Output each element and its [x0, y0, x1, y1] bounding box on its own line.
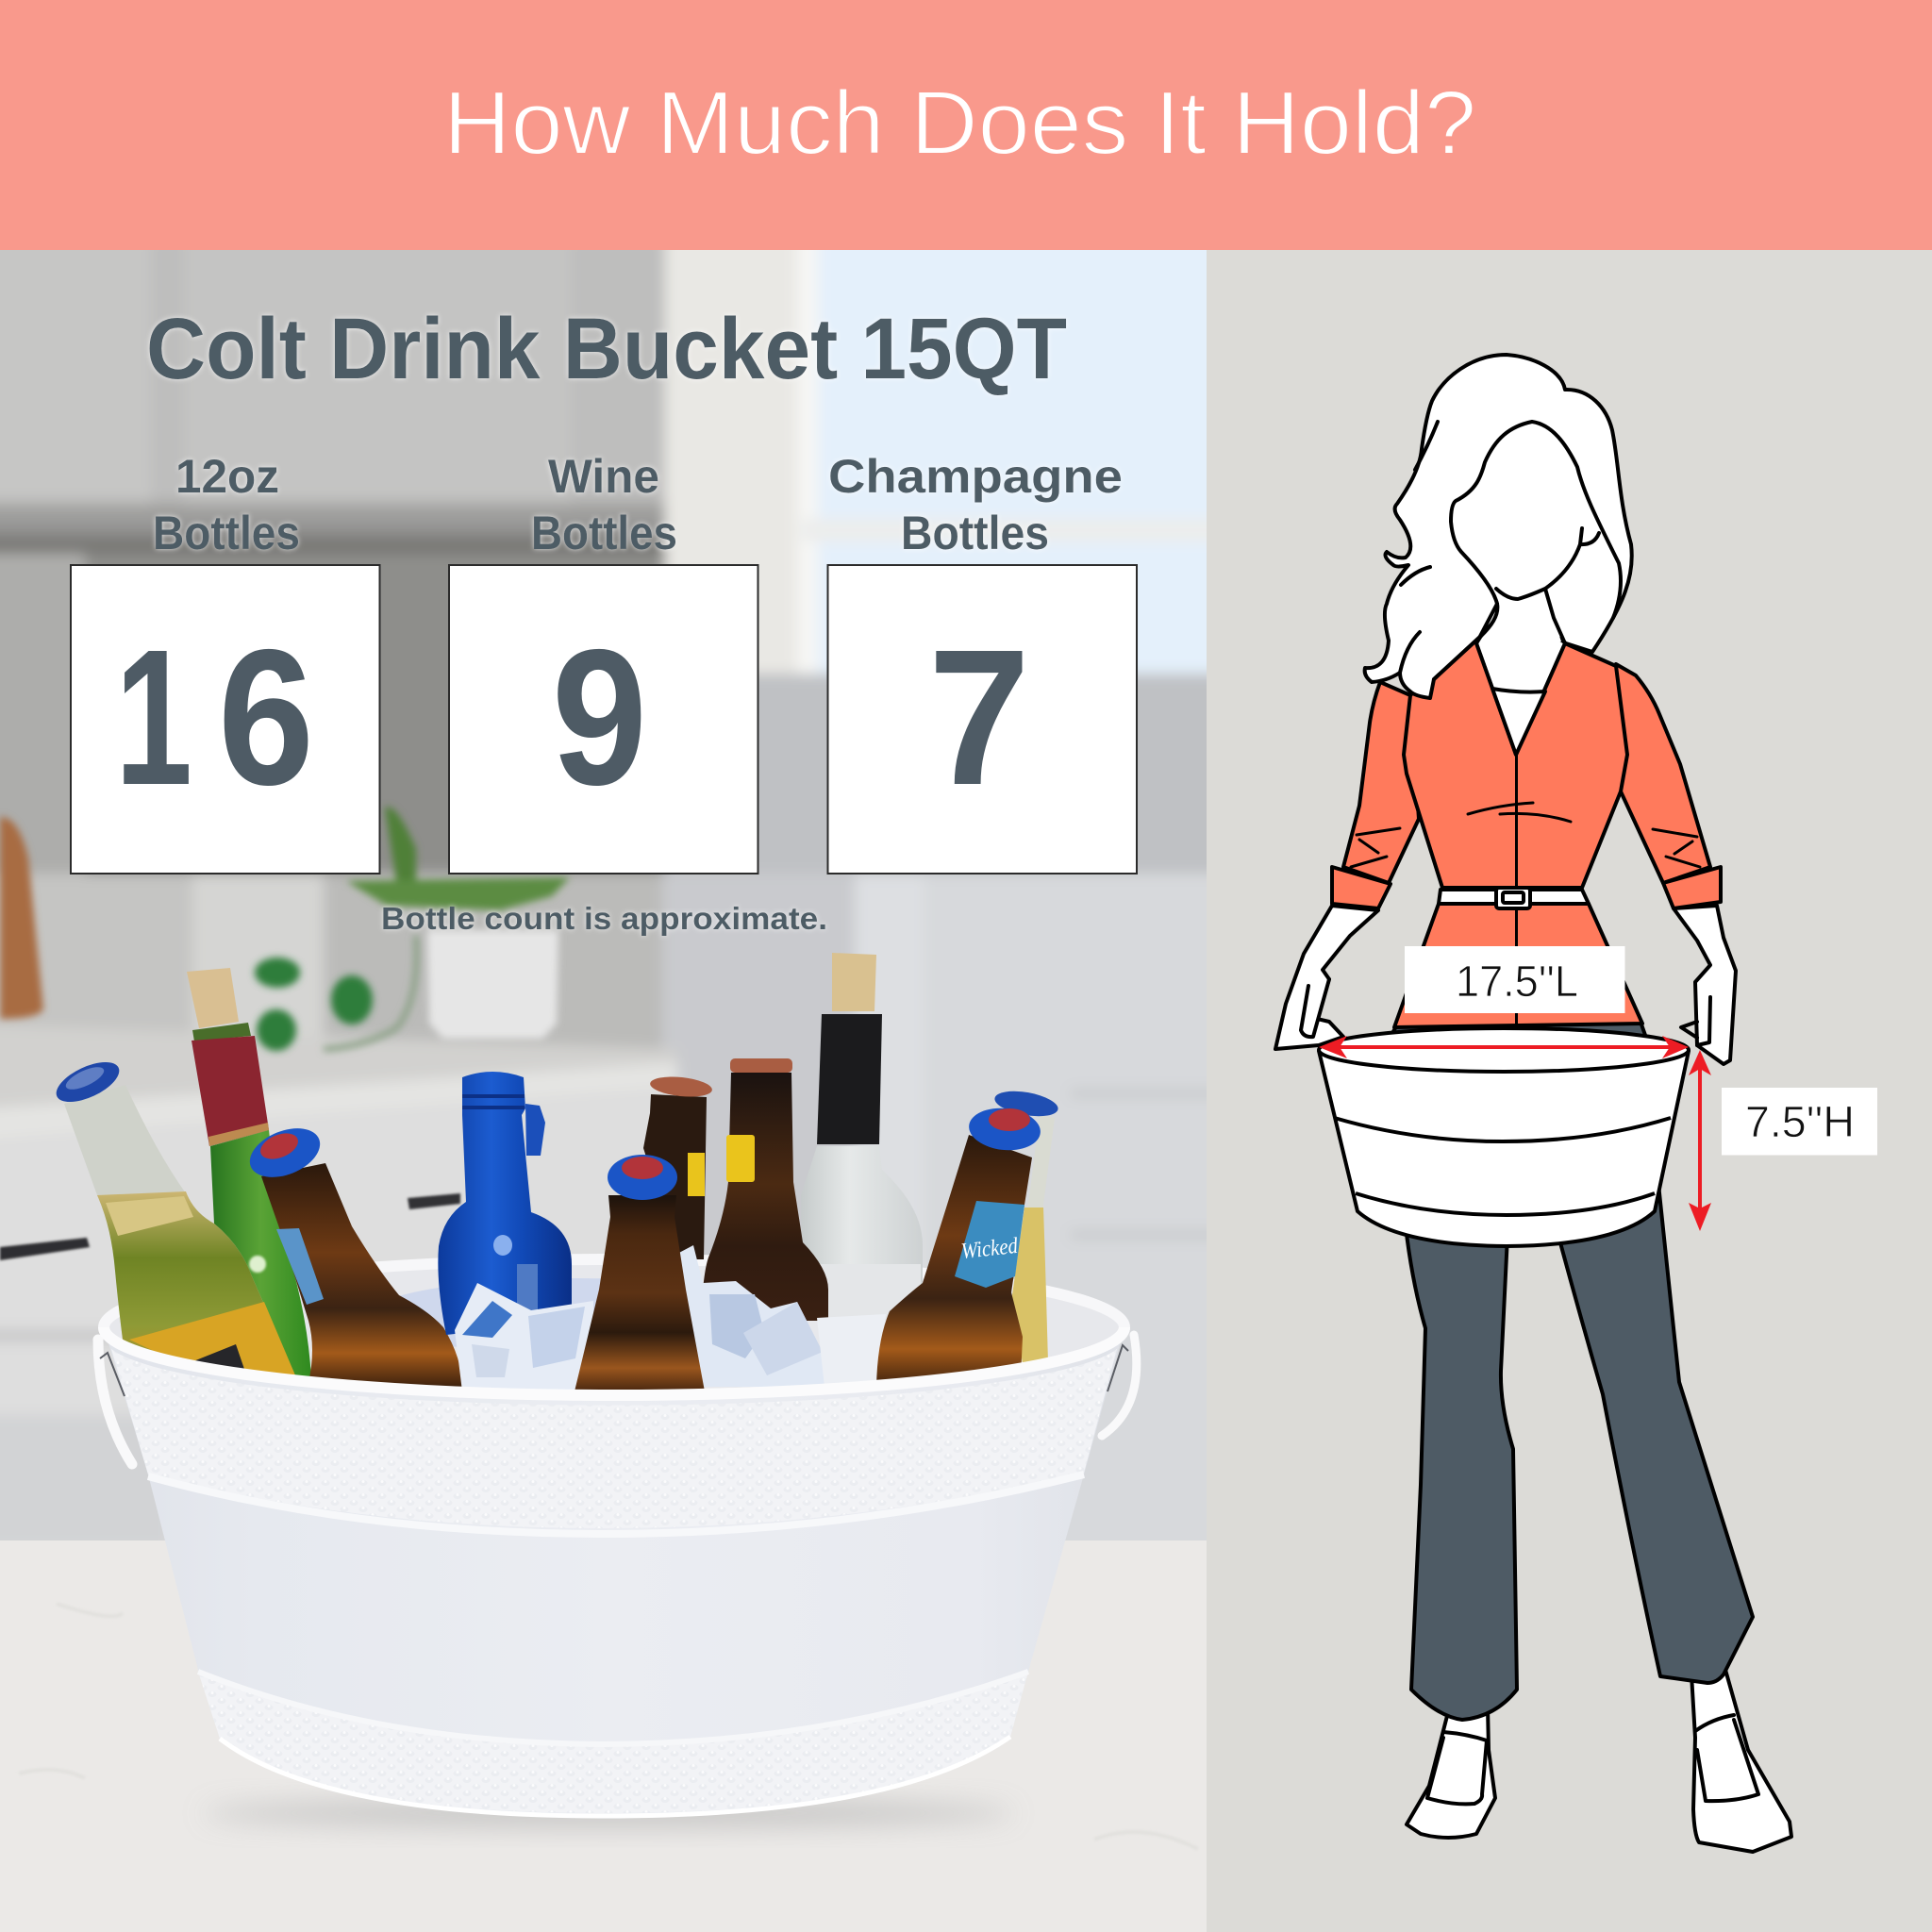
photo background: kitchen	[0, 250, 1207, 1541]
belt	[1439, 888, 1589, 908]
bottle: blue aluminum	[438, 1072, 572, 1335]
blouse details	[1351, 755, 1700, 1028]
column labels: 12oz	[175, 450, 279, 503]
potted plant	[255, 807, 570, 1051]
count card: 12oz bottles: 1	[115, 609, 192, 825]
neck	[1476, 589, 1565, 755]
count card: wine bottles	[449, 565, 758, 874]
count card: champagne bottles	[828, 565, 1137, 874]
hammered upper band	[111, 1349, 1117, 1528]
undershirt	[1492, 689, 1545, 755]
count card: champagne bottles: 7	[928, 609, 1030, 825]
label text: Wicked	[960, 1234, 1020, 1264]
bottles and ice	[51, 953, 1060, 1391]
hair	[1365, 355, 1632, 698]
cabinet handles	[0, 1193, 460, 1260]
blouse	[1332, 636, 1721, 1027]
neck cover	[1483, 592, 1561, 641]
right handle	[1102, 1335, 1137, 1436]
column labels: Bottles	[153, 507, 300, 559]
arrow: length	[1319, 1036, 1689, 1058]
column labels: Bottles	[901, 507, 1049, 559]
figure: woman holding bucket	[1275, 355, 1791, 1852]
right arm and hand	[1674, 906, 1736, 1064]
footnote: Bottle count is approximate.	[381, 901, 827, 936]
count card: wine bottles: 9	[552, 609, 647, 825]
ice pile right	[675, 1245, 886, 1387]
shoes	[1407, 1670, 1791, 1852]
top banner	[0, 0, 1932, 250]
cutting board	[0, 817, 43, 1019]
column labels	[153, 450, 1123, 559]
bucket bands	[148, 1474, 1084, 1534]
marble countertop	[0, 1541, 1207, 1932]
bottle: brown right with blue label	[876, 1105, 1042, 1387]
panel: size illustration	[1207, 250, 1932, 1932]
bottle: brown cider with blue cap	[242, 1119, 462, 1387]
bucket shadow	[203, 1800, 1014, 1826]
size label: length	[1405, 946, 1624, 1013]
small blue cap behind	[525, 1104, 545, 1156]
count card: 12oz bottles	[71, 565, 379, 874]
bottle: pale rear	[992, 1087, 1060, 1363]
panel: product photo	[0, 236, 1231, 1932]
column labels: Wine	[548, 450, 659, 503]
column labels: Bottles	[531, 507, 677, 559]
illustrated bucket	[1319, 1028, 1689, 1246]
bucket back rim and interior	[104, 1259, 1124, 1395]
bottle: brown rear with copper cap	[643, 1074, 713, 1259]
handle hooks	[100, 1345, 1128, 1396]
bottle: brown center front	[575, 1155, 705, 1391]
bottle: green wine bottle with red capsule	[187, 968, 311, 1377]
arrow: height	[1689, 1050, 1711, 1231]
banner title: How Much Does It Hold?	[443, 73, 1476, 174]
ice pile left	[455, 1283, 593, 1391]
count card: 12oz bottles: 6	[218, 609, 314, 825]
heading: product name: Colt Drink Bucket 15QT	[146, 301, 1067, 397]
column labels: Champagne	[828, 450, 1123, 503]
rim shadow line	[109, 1340, 1119, 1397]
front rim	[104, 1327, 1124, 1395]
photo bucket	[98, 1327, 1137, 1816]
face and hair lines	[1400, 422, 1621, 679]
bottle: lager with blue cap	[51, 1054, 298, 1382]
left handle	[98, 1340, 132, 1464]
hammered lower band	[198, 1672, 1028, 1813]
bucket body	[104, 1327, 1124, 1816]
size label: length: 17.5''L	[1456, 957, 1578, 1006]
left arm and hand	[1275, 906, 1378, 1049]
size label: height	[1722, 1088, 1877, 1155]
pants	[1392, 1011, 1753, 1720]
bottle: clear wine with black capsule	[813, 953, 923, 1285]
bottle: tall brown with copper cap	[701, 1058, 828, 1321]
size label: height: 7.5''H	[1745, 1097, 1855, 1146]
